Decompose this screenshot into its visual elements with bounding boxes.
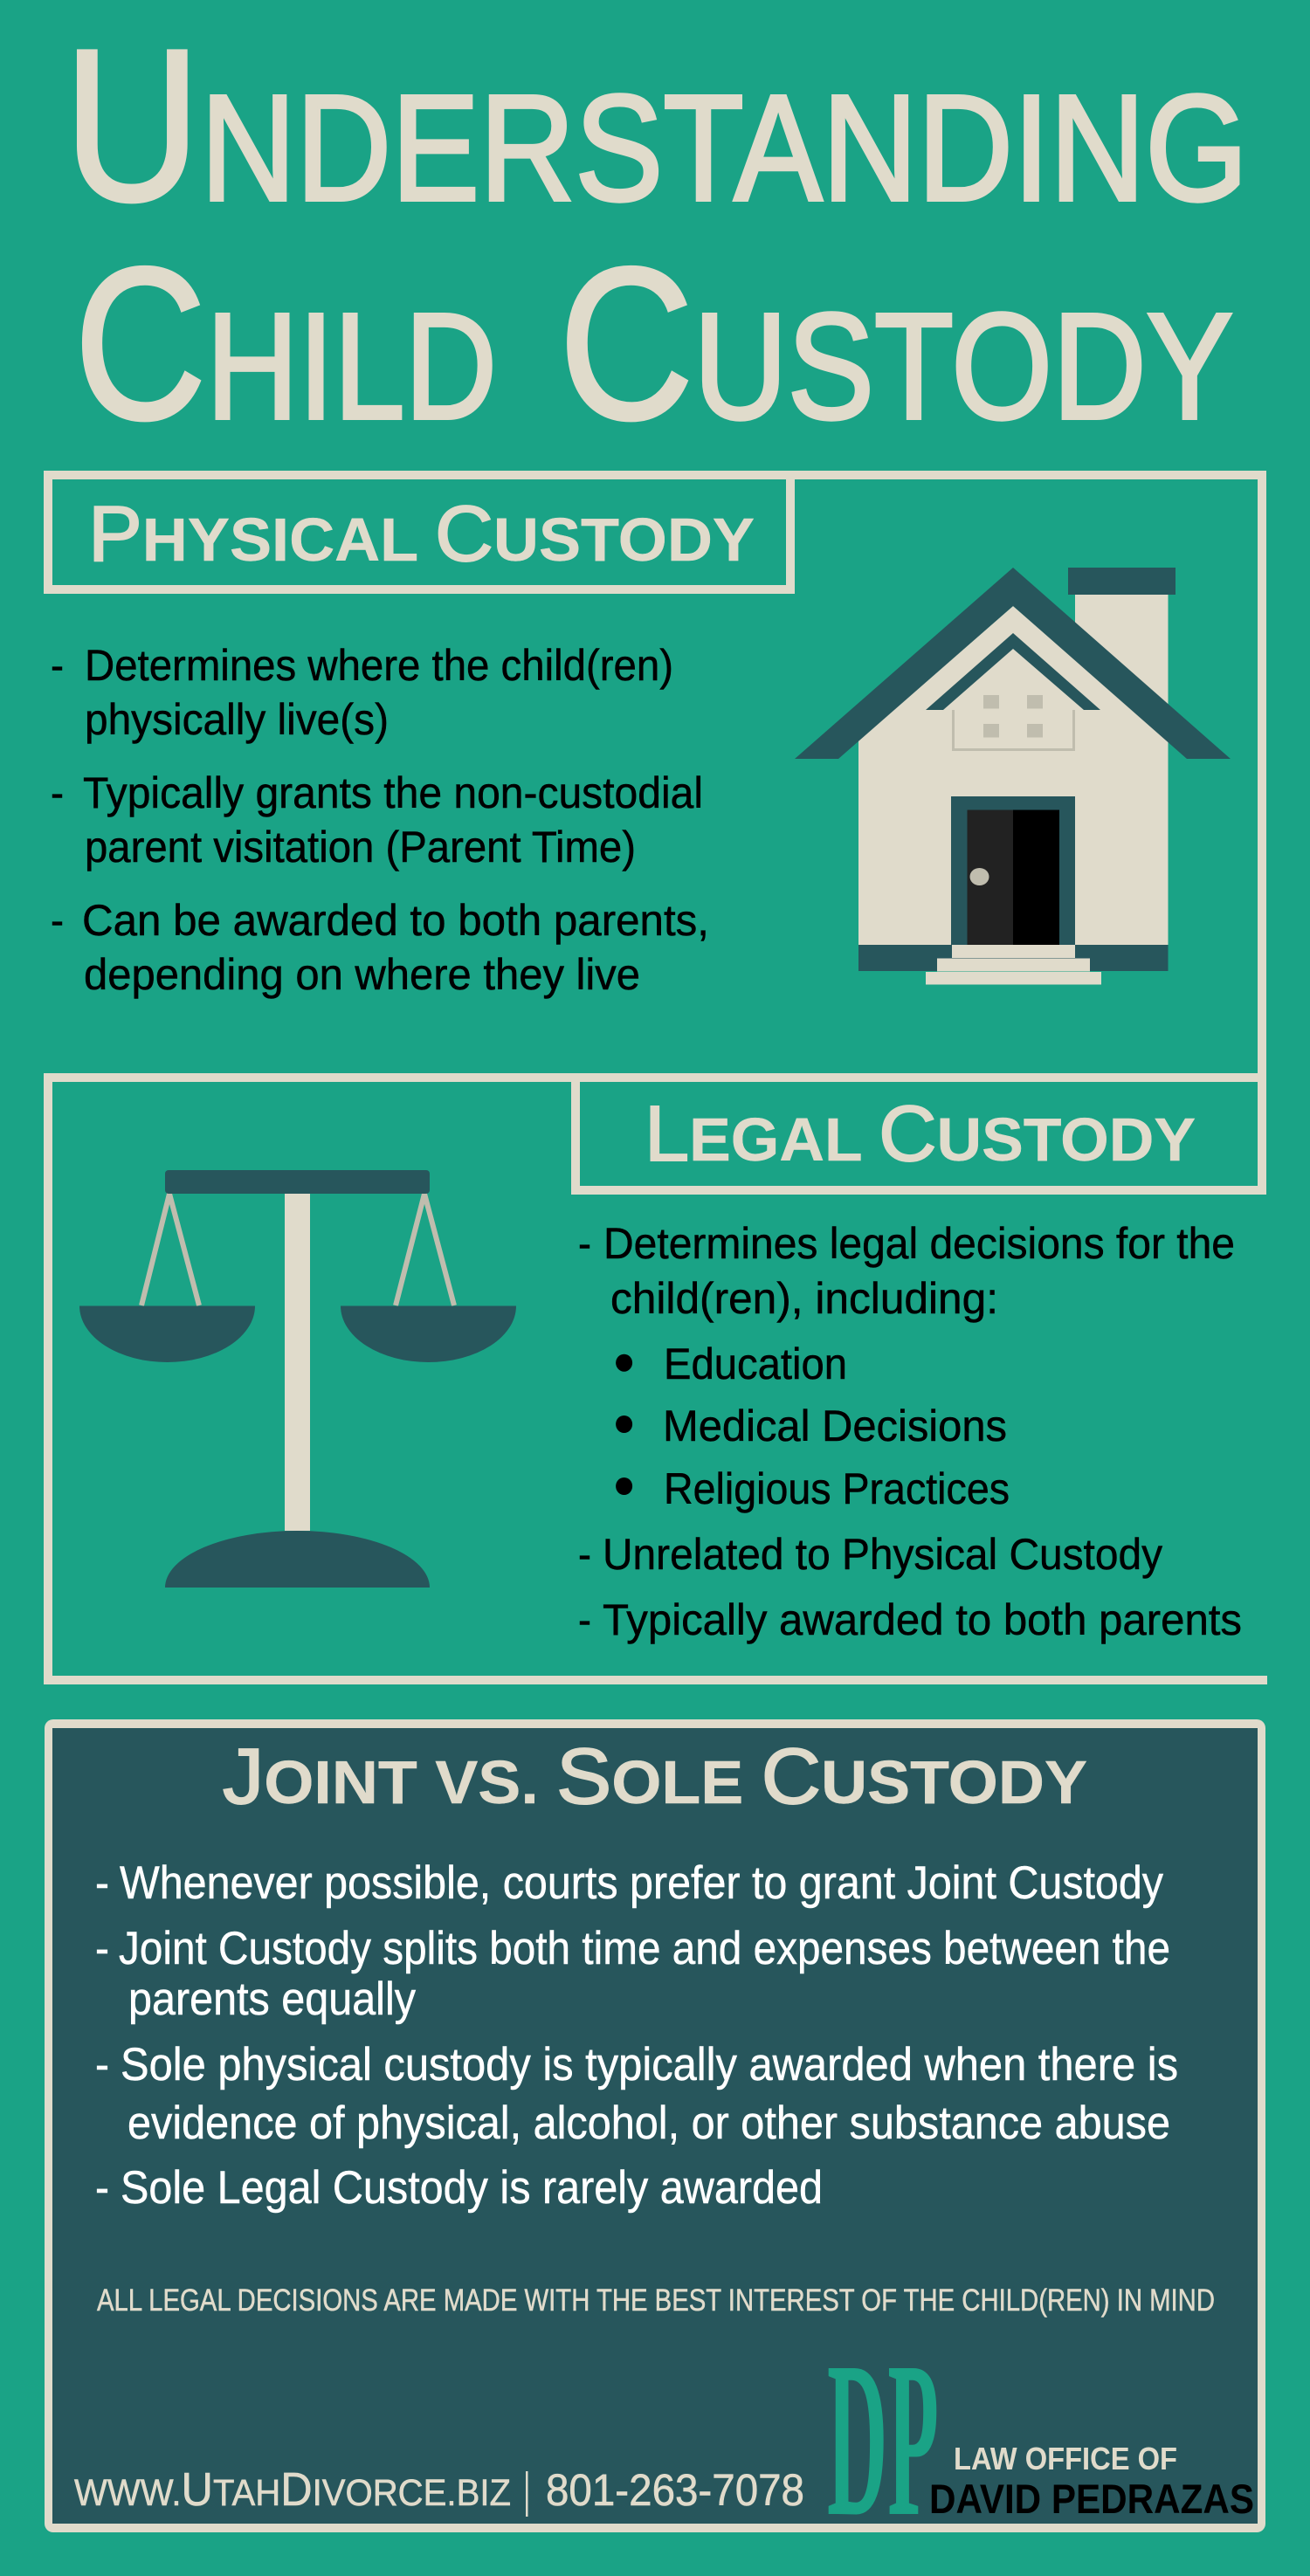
text block: legal custody points: Religious Practices (664, 1464, 1010, 1513)
contact: website and phone: 801-263-7078 (546, 2465, 804, 2515)
text block: joint vs sole points: - (95, 1857, 109, 1909)
icon: house (795, 568, 1231, 985)
text block: joint vs sole points: Sole Legal Custody is rarely awarded (121, 2162, 823, 2214)
text block: physical custody points: depending on where they live (84, 950, 640, 999)
text block: physical custody points (51, 641, 709, 999)
heading: legal custody: LEGAL CUSTODY (645, 1091, 1196, 1178)
text block: joint vs sole points: Joint Custody splits both time and expenses between the (119, 1923, 1170, 1974)
text block: physical custody points: Can be awarded to both parents, (82, 896, 709, 945)
text block: physical custody points: - (51, 768, 64, 817)
text block: legal custody points: Medical Decisions (663, 1402, 1007, 1450)
text block: joint vs sole points (95, 1857, 1178, 2214)
icon: scales of justice (79, 1170, 516, 1588)
logo: DP law office of David Pedrazas (827, 2317, 1254, 2563)
text block: physical custody points: - (51, 641, 64, 690)
text block: legal custody points: Unrelated to Physical Custody (603, 1530, 1162, 1579)
text block: legal custody points: child(ren), including: (610, 1274, 998, 1323)
text block: physical custody points: Determines where the child(ren) (85, 641, 673, 690)
heading: physical custody: PHYSICAL CUSTODY (88, 491, 755, 578)
text block: physical custody points: parent visitation (Parent Time) (85, 823, 636, 871)
text block: legal custody points: Determines legal decisions for the (603, 1219, 1235, 1268)
logo: DP law office of David Pedrazas: DAVID PEDRAZAS (929, 2476, 1254, 2522)
text block: joint vs sole points: Sole physical custody is typically awarded when there is (121, 2039, 1178, 2090)
text block: legal custody points: - (578, 1595, 591, 1644)
text block: joint vs sole points: - (95, 2162, 109, 2214)
text block: physical custody points: Typically grants the non-custodial (83, 768, 703, 817)
contact: website and phone (74, 2463, 804, 2517)
text block: joint vs sole points: parents equally (128, 1973, 416, 2025)
text block: physical custody points: - (51, 896, 64, 945)
text block: legal custody points: Education (664, 1340, 847, 1388)
text block: legal custody points: - (578, 1219, 591, 1268)
text block: joint vs sole points: evidence of physical, alcohol, or other substance abuse (128, 2097, 1170, 2149)
text block: physical custody points: physically live(s) (85, 695, 389, 744)
panel: joint vs sole custody (45, 1719, 1265, 2563)
logo: DP law office of David Pedrazas: DP (827, 2317, 939, 2563)
text block: joint vs sole points: - (95, 1923, 109, 1974)
text block: legal custody points: - (578, 1530, 591, 1579)
text block: joint vs sole points: - (95, 2039, 109, 2090)
text block: legal custody points (578, 1219, 1242, 1644)
title: CUSTODY (559, 222, 1233, 465)
title: CHILD (74, 222, 497, 465)
heading: joint vs sole custody: JOINT VS. SOLE CUSTODY (223, 1733, 1087, 1821)
contact: website and phone: WWW.UTAHDIVORCE.BIZ (74, 2463, 511, 2516)
panel: physical custody (44, 471, 1266, 1082)
panel: legal custody (44, 1073, 1267, 1684)
title (64, 3, 1248, 465)
text block: legal custody points: Typically awarded to both parents (603, 1595, 1242, 1644)
logo: DP law office of David Pedrazas: LAW OFFICE OF (954, 2441, 1177, 2476)
text block: joint vs sole points: Whenever possible, courts prefer to grant Joint Custody (120, 1857, 1163, 1909)
